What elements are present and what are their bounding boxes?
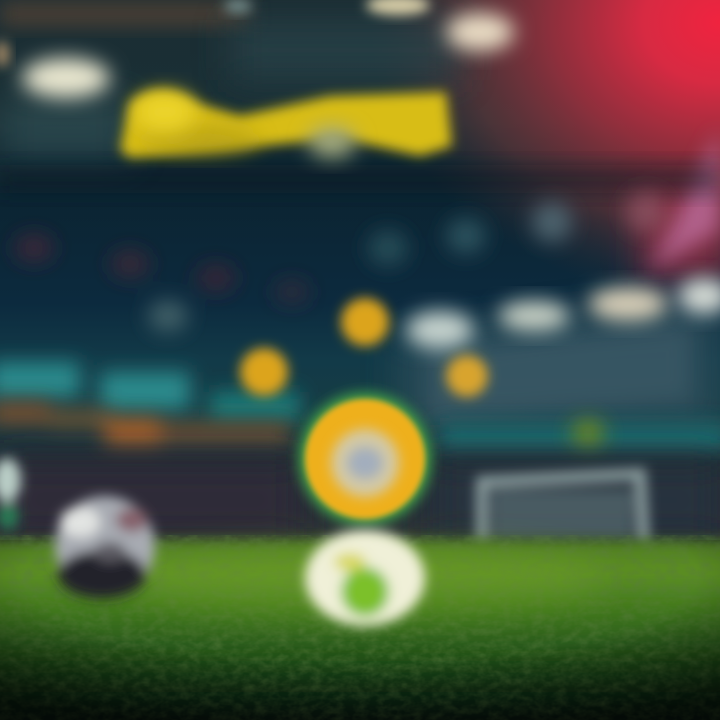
right stand with white lights [400, 278, 720, 430]
upper stands [0, 2, 720, 193]
soccer ball [55, 496, 155, 598]
yellow banner [120, 90, 452, 158]
lower stand shadow [0, 460, 720, 540]
white and green ball [305, 530, 425, 626]
teal band [0, 362, 720, 449]
red light glow [370, 0, 720, 280]
stadium lights [0, 0, 514, 98]
large yellow coin badge [298, 392, 432, 526]
bottom vignette [0, 540, 720, 720]
goal [482, 474, 644, 545]
small yellow coins [240, 298, 488, 397]
crowd markers [14, 192, 666, 332]
grass pitch [0, 535, 720, 720]
left edge figure [0, 458, 21, 530]
orange crowd band [0, 402, 604, 448]
